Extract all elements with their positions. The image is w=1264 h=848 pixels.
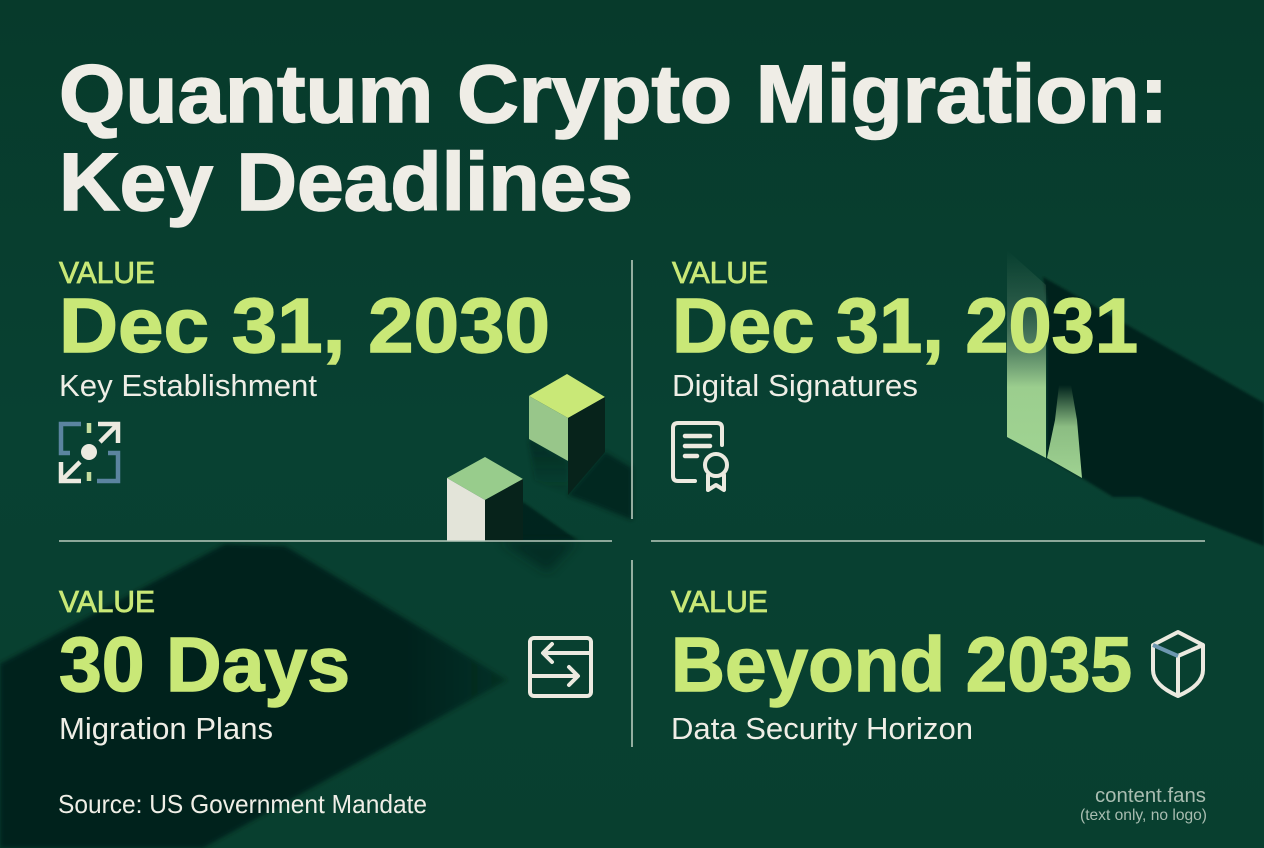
title xyxy=(59,49,1168,228)
shadow: bottom left xyxy=(0,544,507,848)
icon: key exchange xyxy=(61,423,118,481)
value label: VALUE xyxy=(59,255,155,290)
deadline: Dec 31, 2031 xyxy=(672,283,1138,369)
panel: data security horizon xyxy=(671,584,1203,746)
deadline: 30 Days xyxy=(59,622,350,708)
icon: shield cube xyxy=(1153,632,1203,696)
cube shadows xyxy=(485,439,632,572)
credit: content.fans xyxy=(1095,785,1206,807)
description: Digital Signatures xyxy=(672,368,918,403)
deadline: Beyond 2035 xyxy=(671,622,1132,708)
credit xyxy=(1080,785,1207,824)
deadline: Dec 31, 2030 xyxy=(59,283,550,369)
panel: digital signatures xyxy=(672,255,1138,490)
credit: (text only, no logo) xyxy=(1080,807,1207,824)
value label: VALUE xyxy=(59,584,155,619)
value label: VALUE xyxy=(671,584,768,619)
source note: Source: US Government Mandate xyxy=(58,789,427,819)
description: Migration Plans xyxy=(59,711,273,746)
title: Quantum Crypto Migration: xyxy=(59,49,1168,140)
value label: VALUE xyxy=(672,255,768,290)
icon: certificate xyxy=(673,423,727,490)
upper cube xyxy=(529,374,605,495)
icon: transfer arrows xyxy=(530,638,591,696)
divider lines xyxy=(59,260,1205,747)
lower cube xyxy=(447,457,523,541)
panel: key establishment xyxy=(59,255,550,481)
shadow: right column xyxy=(1043,277,1264,546)
title: Key Deadlines xyxy=(59,137,633,228)
description: Key Establishment xyxy=(59,368,317,403)
description: Data Security Horizon xyxy=(671,711,973,746)
panel: migration plans xyxy=(59,584,591,746)
cubes illustration xyxy=(447,374,632,572)
light panels: right column xyxy=(1007,250,1082,478)
